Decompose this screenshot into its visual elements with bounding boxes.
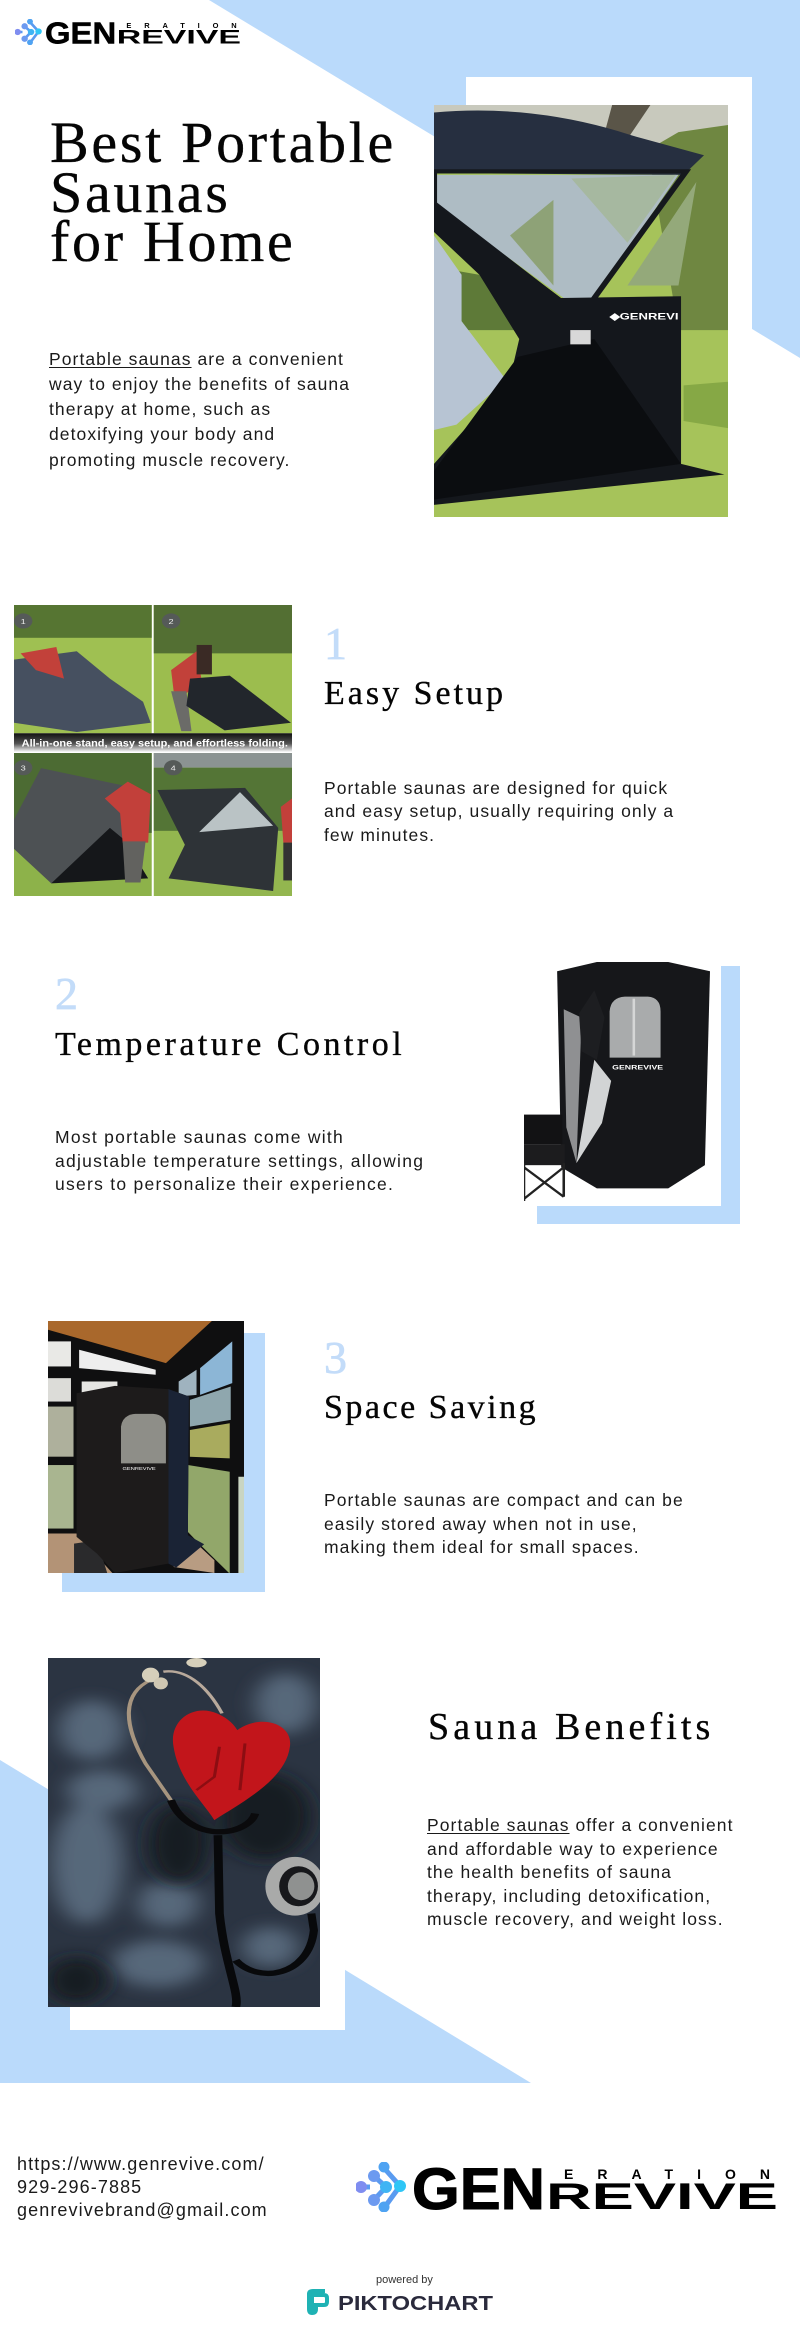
photo: black hexagonal sauna with chair (524, 962, 710, 1201)
photo: sauna in sunroom (48, 1321, 244, 1573)
logo: footer: ERATION (564, 2166, 770, 2182)
title: Best Portable (50, 110, 396, 175)
intro text: promoting muscle recovery. (49, 450, 290, 470)
contact details: 929-296-7885 (17, 2177, 142, 2197)
heading: space saving: Space Saving (324, 1388, 538, 1426)
text: sauna benefits: muscle recovery, and weight loss. (427, 1909, 724, 1929)
blue L frame (537, 966, 740, 1224)
number 2: 2 (55, 968, 78, 1018)
powered by label: powered by (376, 2274, 433, 2286)
text: easy setup: Portable saunas are designed for quick (324, 778, 668, 798)
title (50, 110, 396, 274)
logo: top: ERATION (126, 21, 237, 30)
text: sauna benefits: the health benefits of sauna (427, 1862, 672, 1882)
text: easy setup: and easy setup, usually requiring only a (324, 801, 674, 821)
intro text: way to enjoy the benefits of sauna (49, 374, 350, 394)
number 3: 3 (324, 1332, 347, 1382)
contact details: https://www.genrevive.com/ (17, 2154, 265, 2174)
photo: four setup steps: 3 (21, 763, 26, 772)
intro text: Portable saunas are a convenient (49, 349, 344, 369)
blue block behind room photo (62, 1333, 265, 1592)
photo: four setup steps: 2 (169, 617, 174, 626)
text: sauna benefits: therapy, including detoxification, (427, 1886, 711, 1906)
hero photo: portable sauna tent on lawn (434, 105, 728, 517)
text: space saving: making them ideal for small spaces. (324, 1537, 640, 1557)
background triangle bottom (0, 1760, 531, 2083)
contact details: genrevivebrand@gmail.com (17, 2200, 268, 2220)
photo: four setup steps: 1 (21, 617, 26, 626)
text: space saving (324, 1490, 684, 1557)
text: temperature control: users to personalize their experience. (55, 1174, 394, 1194)
text: temperature control: Most portable saunas come with (55, 1127, 344, 1147)
heading: easy setup: Easy Setup (324, 674, 506, 712)
text: temperature control: adjustable temperature settings, allowing (55, 1151, 424, 1171)
number 1: 1 (324, 618, 347, 668)
text: sauna benefits: and affordable way to experience (427, 1839, 719, 1859)
contact details (17, 2154, 268, 2220)
text: sauna benefits (427, 1815, 734, 1929)
white frame behind hero photo (466, 77, 752, 331)
photo: four setup steps: 4 (171, 763, 176, 772)
logo: top (15, 19, 241, 45)
text: sauna benefits: Portable saunas offer a convenient (427, 1815, 734, 1835)
photo: black hexagonal sauna with chair: GENREVIVE (612, 1065, 664, 1071)
photo: sauna in sunroom: GENREVIVE (123, 1467, 156, 1472)
intro text: detoxifying your body and (49, 424, 275, 444)
photo: four setup steps (14, 605, 292, 896)
text: easy setup (324, 778, 674, 845)
title: Saunas (50, 160, 231, 224)
background triangle top (209, 0, 800, 358)
hero photo: portable sauna tent on lawn: ◆GENREVI (608, 312, 678, 322)
intro text (49, 349, 350, 470)
heading: temperature control: Temperature Control (55, 1026, 405, 1062)
heading: sauna benefits: Sauna Benefits (428, 1706, 714, 1748)
photo: heart and stethoscope (48, 1658, 320, 2007)
piktochart logo: PIKTOCHART (338, 2293, 493, 2315)
text: space saving: easily stored away when not in use, (324, 1514, 638, 1534)
intro text: therapy at home, such as (49, 399, 271, 419)
text: space saving: Portable saunas are compact and can be (324, 1490, 684, 1510)
text: easy setup: few minutes. (324, 825, 435, 845)
piktochart logo (307, 2289, 493, 2315)
title: for Home (50, 209, 295, 274)
logo: footer (356, 2162, 778, 2212)
white frame behind heart photo (70, 1800, 345, 2030)
text: temperature control (55, 1127, 424, 1194)
